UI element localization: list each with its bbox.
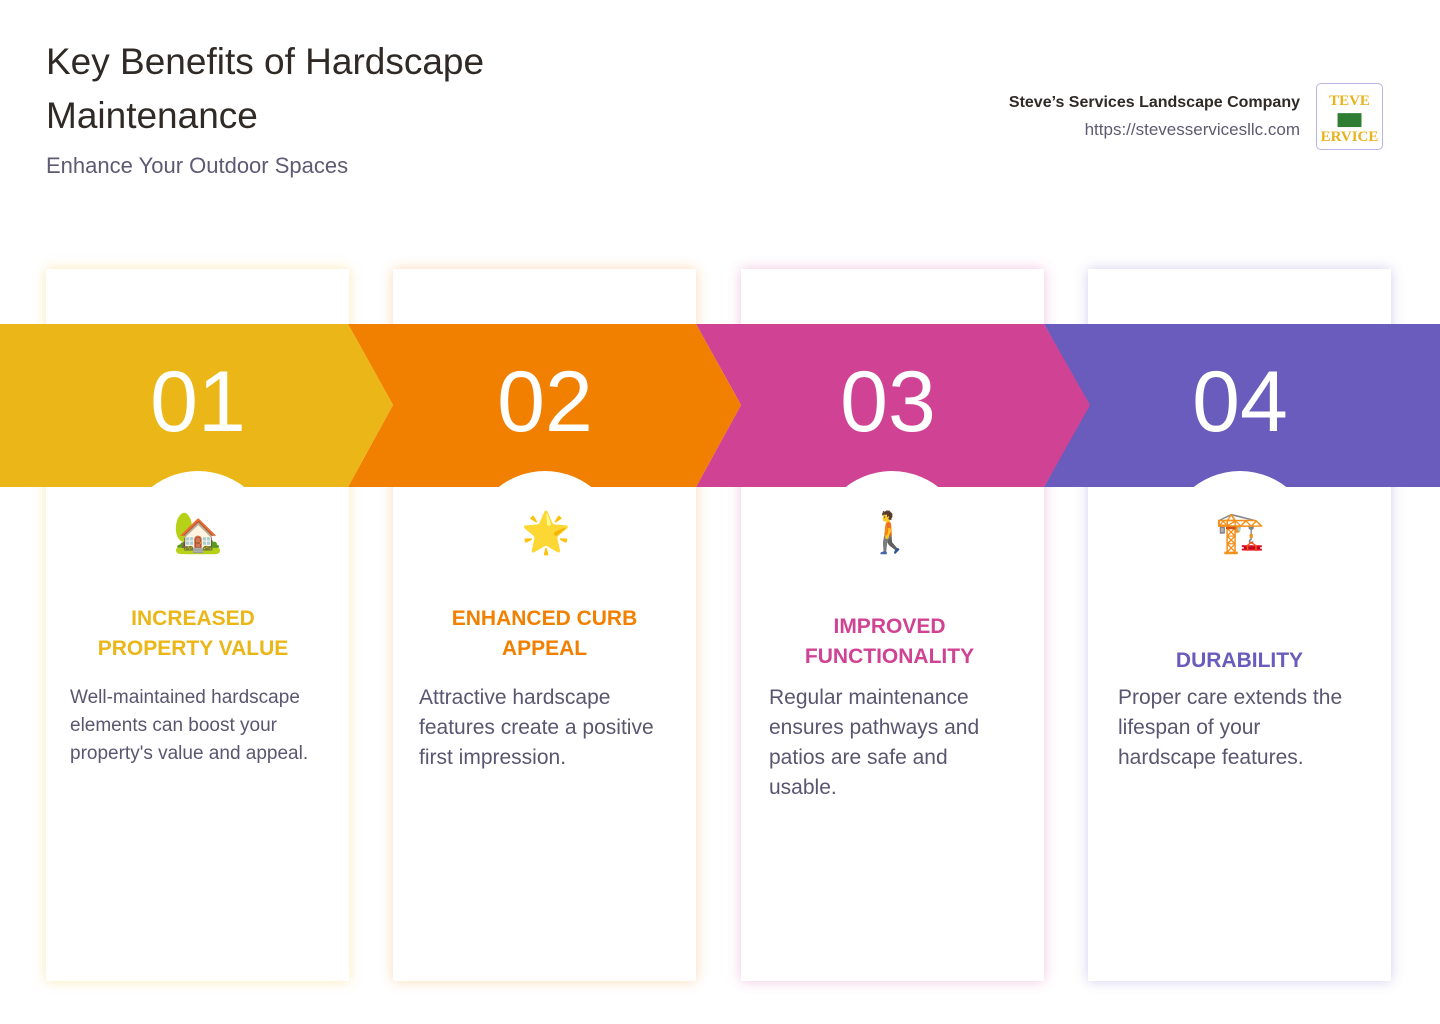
icon: star: 🌟 <box>521 511 571 555</box>
text: card 3: FUNCTIONALITY <box>805 645 974 668</box>
text: card 1 <box>70 607 308 764</box>
company info: https://stevesservicesllc.com <box>1085 120 1300 139</box>
logo: ERVICE <box>1321 129 1378 145</box>
text: card 2: ENHANCED CURB <box>452 607 637 630</box>
text: card 1: INCREASED <box>131 607 255 630</box>
text: card 1: PROPERTY VALUE <box>98 637 288 660</box>
text: card 3: Regular maintenance ensures pathways and patios are safe and usable. <box>769 686 979 799</box>
logo: TEVE <box>1329 93 1370 109</box>
card 1 <box>46 269 349 981</box>
text: card 2: Attractive hardscape features create a positive first impression. <box>419 686 654 769</box>
text: card 1: Well-maintained hardscape elements can boost your property's value and appeal. <box>70 687 308 764</box>
card 4 <box>1088 269 1391 981</box>
number 02: 02 <box>497 354 593 450</box>
icon: walking: 🚶 <box>865 511 915 555</box>
card 3 <box>741 269 1044 981</box>
number 04: 04 <box>1192 354 1288 450</box>
company info <box>1009 94 1300 139</box>
subtitle: Enhance Your Outdoor Spaces <box>46 153 348 178</box>
text: card 2 <box>419 607 654 769</box>
text: card 2: APPEAL <box>502 637 587 660</box>
logo <box>1316 83 1383 150</box>
card 2 <box>393 269 696 981</box>
title: Key Benefits of Hardscape Maintenance <box>46 41 484 136</box>
icon: house: 🏡 <box>173 511 223 555</box>
company info: Steve’s Services Landscape Company <box>1009 94 1300 111</box>
text: card 4: DURABILITY <box>1176 649 1303 672</box>
icon: crane: 🏗️ <box>1215 511 1265 555</box>
text: card 4: Proper care extends the lifespan of your hardscape features. <box>1118 686 1342 769</box>
text: card 3: IMPROVED <box>833 615 946 638</box>
number 03: 03 <box>840 354 936 450</box>
number 01: 01 <box>150 354 246 450</box>
text: card 3 <box>769 615 979 799</box>
logo: ▆▆ <box>1338 111 1361 127</box>
text: card 4 <box>1118 649 1342 769</box>
